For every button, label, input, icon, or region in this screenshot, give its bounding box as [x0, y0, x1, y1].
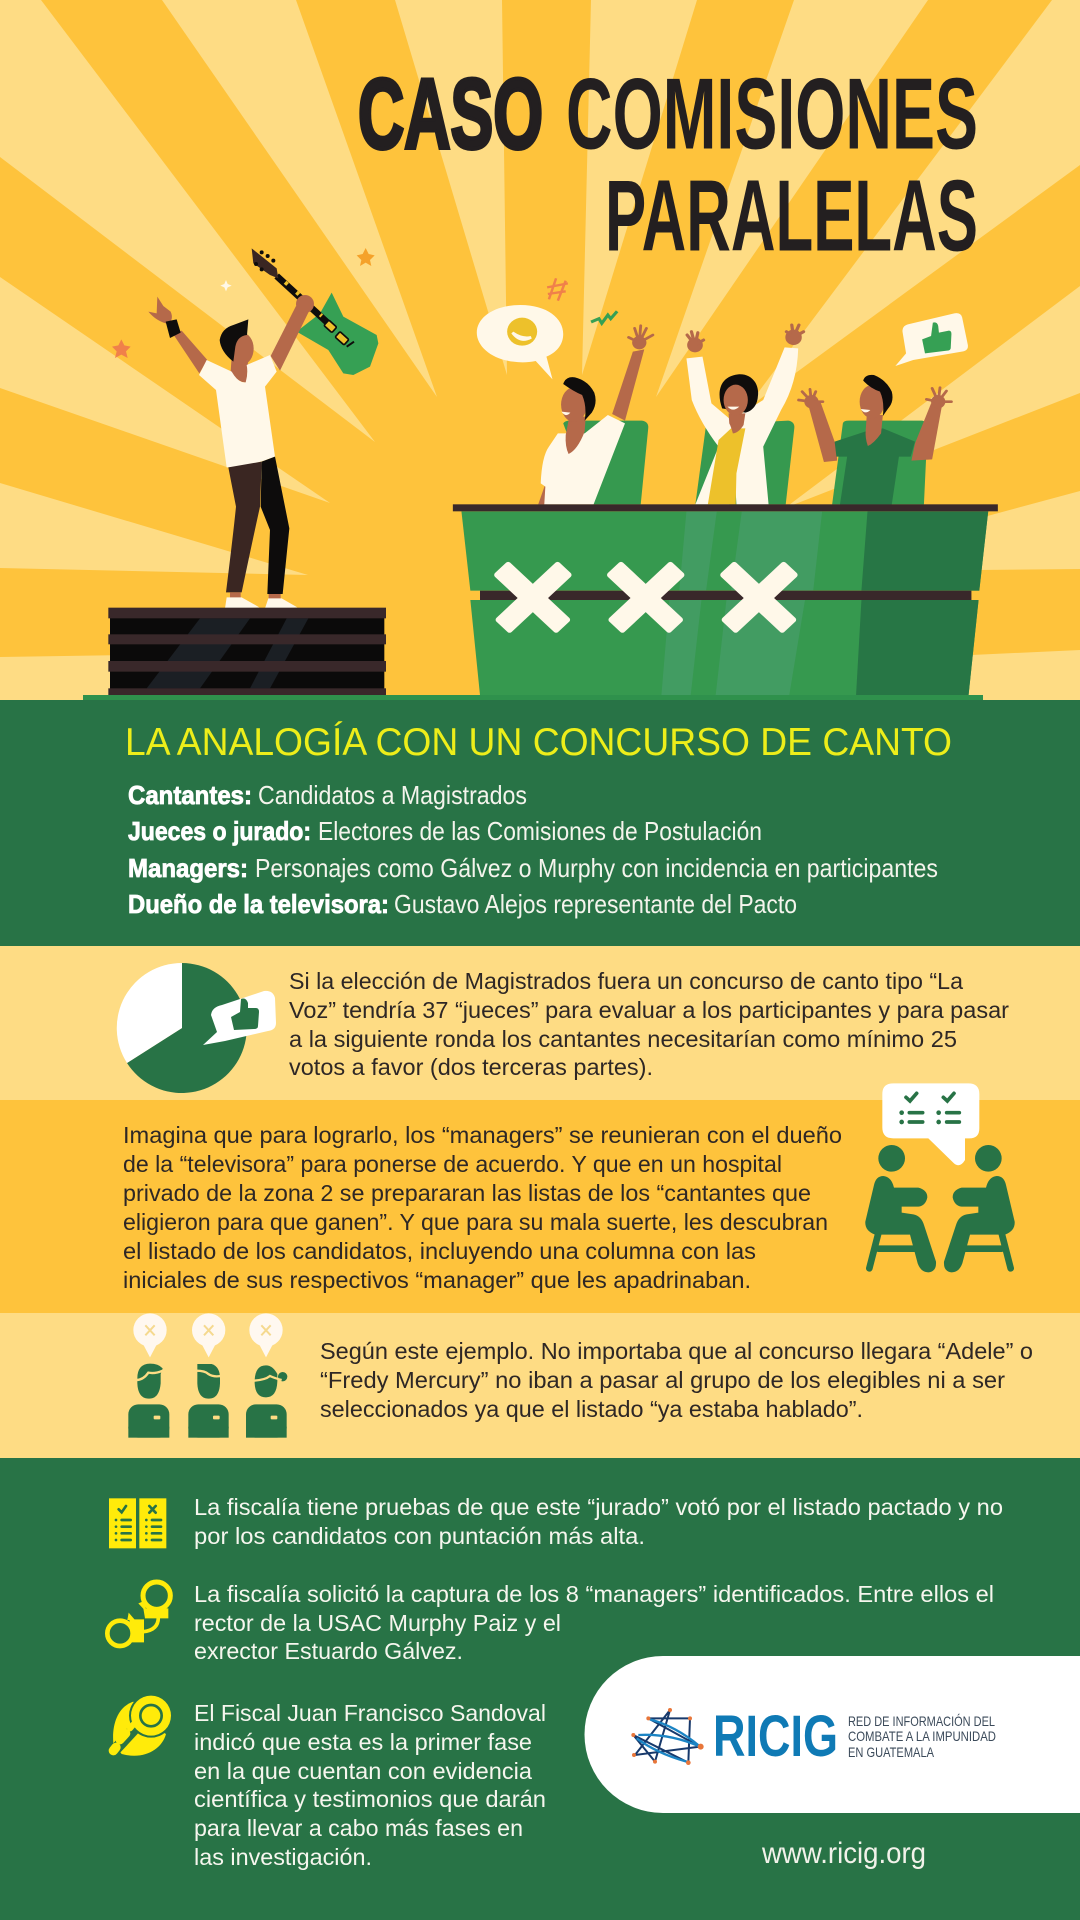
text block [320, 1338, 1033, 1422]
icon: magnifying glass over leaf [113, 1694, 173, 1756]
icon: three people with rejection pins [128, 1313, 287, 1438]
text: evidence [194, 1494, 1003, 1549]
text: prosecutor statement: en la que cuentan con evidencia [194, 1758, 532, 1784]
definition list: Managers: [128, 853, 248, 883]
panel: managers agreement [0, 1083, 1080, 1313]
logo wordmark: RICIG [713, 1704, 838, 1769]
text block [123, 1122, 842, 1293]
text block: “Fredy Mercury” no iban a pasar al grupo de los elegibles ni a ser [320, 1367, 1005, 1393]
stage floor [83, 695, 983, 701]
icon: thumbs up bubble [895, 313, 968, 366]
text: evidence: por los candidatos con puntación más alta. [194, 1523, 645, 1549]
judge 3 [799, 375, 951, 504]
desk [453, 504, 998, 695]
judges desk [453, 278, 998, 695]
text: arrest request: La fiscalía solicitó la captura de los 8 “managers” identificados. Entre ellos el [194, 1581, 994, 1607]
icon: two people meeting with checklist bubble [865, 1083, 1015, 1272]
text block: iniciales de sus respectivos “manager” que les apadrinaban. [123, 1267, 751, 1293]
text: prosecutor statement: El Fiscal Juan Francisco Sandoval [194, 1700, 546, 1726]
singer figure [148, 295, 314, 609]
judge 2 [686, 325, 804, 504]
logo tagline: COMBATE A LA IMPUNIDAD [848, 1728, 996, 1744]
text block: Según este ejemplo. No importaba que al concurso llegara “Adele” o [320, 1338, 1033, 1364]
icon: voting documents [109, 1498, 166, 1548]
icon: three X marks [493, 561, 799, 634]
definition list: Jueces o jurado: [128, 816, 311, 846]
icon: handcuffs [107, 1582, 170, 1646]
icon: hash [547, 278, 568, 301]
definition list: Dueño de la televisora: [128, 889, 389, 919]
judge 1 [538, 326, 653, 504]
text block: a la siguiente ronda los cantantes necesitarían como mínimo 25 [289, 1026, 957, 1052]
text block: votos a favor (dos terceras partes). [289, 1054, 653, 1080]
definition list: Cantantes: [128, 780, 252, 810]
singer on platform [108, 248, 386, 696]
website url: www.ricig.org [761, 1837, 926, 1870]
panel: example conclusion [0, 1313, 1080, 1458]
icon: RICIG star logo [631, 1708, 704, 1765]
text: prosecutor statement: científica y testimonios que darán [194, 1786, 546, 1812]
text: arrest request: exrector Estuardo Gálvez. [194, 1638, 463, 1664]
text block: Imagina que para lograrlo, los “managers” se reunieran con el dueño [123, 1122, 842, 1148]
definition list: Candidatos a Magistrados [258, 780, 527, 810]
text block: Voz” tendría 37 “jueces” para evaluar a los participantes y para pasar [289, 997, 1009, 1023]
text block: de la “televisora” para ponerse de acuerdo. Y que en un hospital [123, 1151, 782, 1177]
heading: LA ANALOGÍA CON UN CONCURSO DE CANTO [125, 721, 952, 764]
definition list: Personajes como Gálvez o Murphy con incidencia en participantes [255, 853, 938, 883]
icon: pie chart with thumbs up [117, 963, 276, 1093]
text: prosecutor statement: indicó que esta es la primer fase [194, 1729, 532, 1755]
panel: prosecution facts [0, 1458, 1080, 1920]
title [358, 58, 978, 272]
text block: Si la elección de Magistrados fuera un concurso de canto tipo “La [289, 968, 963, 994]
icon: stars [112, 248, 375, 358]
definition list: Electores de las Comisiones de Postulación [318, 816, 762, 846]
text block: el listado de los candidatos, incluyendo una columna con las [123, 1238, 756, 1264]
panel: analogy definitions [0, 700, 1080, 946]
icon: squiggle [591, 311, 617, 323]
text block: eligieron para que ganen”. Y que para su mala suerte, les descubran [123, 1209, 828, 1235]
text: evidence: La fiscalía tiene pruebas de que este “jurado” votó por el listado pactado y no [194, 1494, 1003, 1520]
definition list [128, 780, 938, 919]
definition list: Gustavo Alejos representante del Pacto [394, 889, 797, 919]
title: CASO [358, 58, 543, 169]
text: prosecutor statement [194, 1700, 546, 1870]
text block: seleccionados ya que el listado “ya estaba hablado”. [320, 1396, 863, 1422]
logo tagline [848, 1713, 996, 1760]
panel: hero with sunburst [0, 0, 1080, 701]
icon: laughing speech bubble [477, 305, 563, 379]
logo panel [584, 1656, 1080, 1813]
text block: privado de la zona 2 se prepararan las listas de los “cantantes que [123, 1180, 811, 1206]
text: prosecutor statement: para llevar a cabo más fases en [194, 1815, 523, 1841]
text: arrest request: rector de la USAC Murphy Paiz y el [194, 1610, 561, 1636]
icon: guitar [252, 248, 378, 375]
platform [108, 608, 386, 696]
logo tagline: EN GUATEMALA [848, 1744, 935, 1760]
text block [289, 968, 1009, 1080]
text: arrest request [194, 1581, 994, 1664]
logo tagline: RED DE INFORMACIÓN DEL [848, 1713, 995, 1729]
text: prosecutor statement: las investigación. [194, 1844, 372, 1870]
sunburst rays [0, 0, 1080, 700]
panel: la voz example [0, 946, 1080, 1100]
